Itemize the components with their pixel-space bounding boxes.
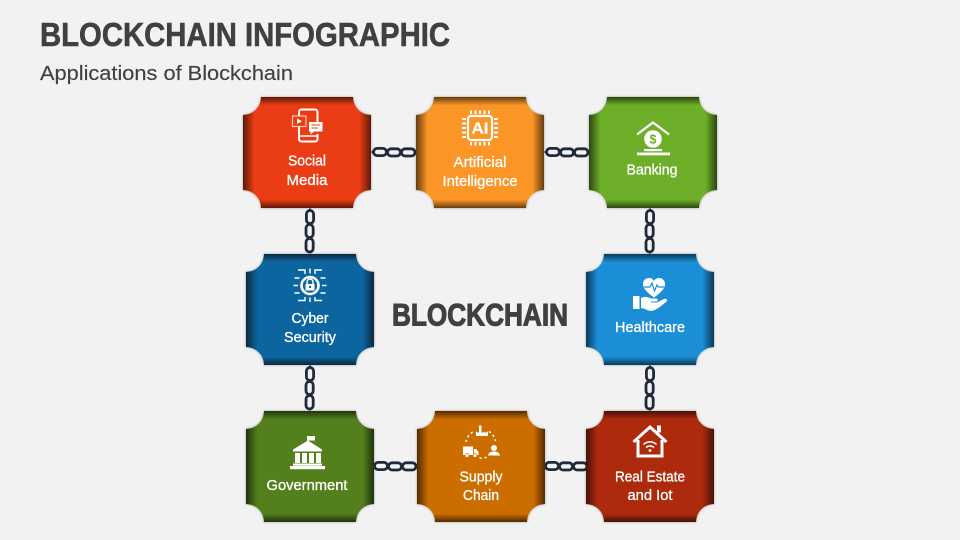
label [286, 154, 328, 189]
label: Real Estate [615, 470, 685, 486]
label: Social [288, 154, 326, 170]
panel: social media [243, 97, 371, 208]
label: and Iot [628, 488, 672, 504]
icon: bank house with coin: $ [650, 132, 657, 146]
chain: social media to artificial intelligence [372, 148, 416, 156]
panel: cyber security [246, 254, 374, 365]
panel: government [246, 411, 374, 522]
chain: real estate to supply chain [544, 462, 588, 470]
label: Government [266, 478, 348, 494]
label: Security [284, 330, 337, 346]
label [615, 470, 685, 504]
label: Chain [463, 488, 499, 504]
panel: banking [589, 97, 717, 208]
label: Cyber [292, 311, 329, 327]
label: Media [286, 173, 328, 189]
icon: heart on hand [633, 278, 667, 311]
label: Artificial [454, 155, 506, 171]
icon: smart house [634, 426, 666, 456]
chain: government to cyber security [306, 366, 314, 410]
label: Intelligence [442, 174, 518, 190]
icon: AI chip: AI [472, 120, 488, 138]
label: Banking [626, 162, 678, 178]
chain: supply chain to government [372, 462, 418, 470]
icon: circuit lock [294, 268, 326, 302]
chain: artificial intelligence to banking [544, 148, 590, 156]
icon: government building [290, 436, 325, 469]
chain: healthcare to real estate [646, 366, 654, 410]
panel: supply chain [417, 411, 545, 522]
icon: phone with media and chat [292, 110, 322, 142]
label: Supply [460, 470, 503, 486]
subtitle: Applications of Blockchain [40, 62, 293, 85]
icon: supply cycle [463, 426, 500, 458]
chain: cyber security to social media [306, 208, 314, 254]
label: Healthcare [615, 320, 685, 336]
panel: real estate and iot [586, 411, 714, 522]
panel: healthcare [586, 254, 714, 365]
central label: BLOCKCHAIN [392, 296, 568, 332]
label [284, 311, 337, 346]
label [442, 155, 518, 190]
chain: banking to healthcare [646, 208, 654, 254]
label [460, 470, 503, 504]
title: BLOCKCHAIN INFOGRAPHIC [40, 16, 450, 53]
panel: artificial intelligence [416, 97, 544, 208]
